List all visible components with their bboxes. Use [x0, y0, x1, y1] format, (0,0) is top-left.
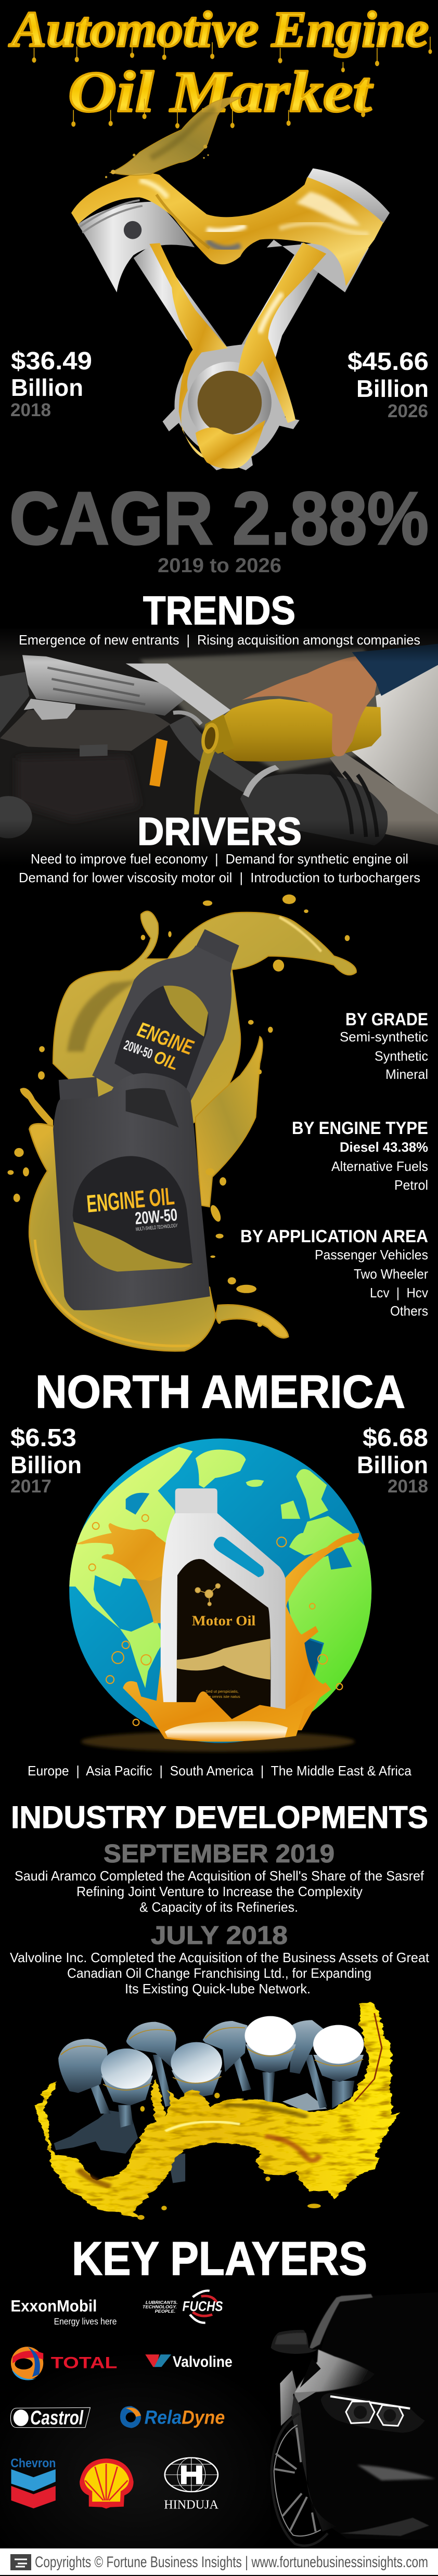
bottom fade: [0, 820, 438, 865]
photo: pouring oil into engine: [0, 625, 438, 865]
dipstick: [149, 738, 168, 787]
stat: 2018 market size: [10, 347, 92, 420]
illustration: globe and motor oil bottle: [67, 1438, 375, 1751]
logo: RelaDyne: RelaDyne: [145, 2406, 225, 2428]
segment: by application area: Two Wheeler: [354, 1266, 428, 1282]
segment: by application area: [240, 1227, 428, 1319]
right piston lower skirt: [267, 240, 369, 292]
segment: by grade: BY GRADE: [345, 1010, 428, 1029]
logo: Hinduja: [164, 2458, 219, 2511]
logo: ExxonMobil: [10, 2297, 117, 2326]
logo: Total: [11, 2347, 118, 2380]
segment: by application area: BY APPLICATION AREA: [240, 1227, 428, 1246]
logo: Fuchs: PEOPLE.: [155, 2309, 175, 2314]
logo: Castrol: [10, 2406, 90, 2429]
oil coating across pistons: [71, 173, 383, 286]
stat: 2018 market size: $36.49: [11, 347, 92, 375]
splash crown in front: [123, 1666, 331, 1742]
segment: by engine type: [292, 1118, 428, 1193]
label molecule: [195, 1583, 220, 1606]
stat: North America 2017: 2017: [10, 1476, 51, 1497]
logo: Fuchs: TECHNOLOGY.: [143, 2304, 177, 2309]
oil splash behind bottle: [75, 1523, 359, 1730]
oil wave: [35, 2003, 399, 2220]
fender highlight: [280, 2371, 297, 2426]
development: September 2019: Refining Joint Venture to Increase the Complexity: [76, 1884, 363, 1899]
logo: Chevron: Chevron: [10, 2456, 56, 2470]
logo: Valvoline: [145, 2353, 233, 2371]
logo: ExxonMobil: ExxonMobil: [10, 2297, 97, 2315]
jug label text: MULTI-SHIELD TECHNOLOGY: [136, 1222, 178, 1232]
heading: drivers: DRIVERS: [137, 809, 302, 853]
segment: by engine type: Petrol: [394, 1177, 428, 1193]
dim engine detail lower left: [17, 755, 139, 820]
globe: [67, 1438, 375, 1743]
segment: by application area: Others: [390, 1303, 428, 1319]
hand: [242, 656, 377, 756]
stat: North America 2018: Billion: [357, 1451, 428, 1478]
title line 2: Oil Market: [68, 60, 373, 124]
stat: 2018 market size: Billion: [11, 374, 83, 401]
hoses: [0, 712, 388, 845]
illustration: engine pistons in oil: [35, 2003, 399, 2220]
stat: North America 2018: $6.68: [363, 1424, 428, 1452]
oil running down right rod: [238, 242, 326, 423]
windshield pillar: [310, 2294, 373, 2349]
back label text: OIL: [151, 1047, 181, 1074]
logo: ExxonMobil: Energy lives here: [54, 2316, 117, 2326]
glow under splash: [81, 1731, 355, 1751]
label small text: [205, 1689, 240, 1699]
logo: Shell: [80, 2458, 134, 2509]
piston ring accents: [61, 2027, 363, 2090]
stat: North America 2017: $6.53: [10, 1424, 76, 1452]
illustration: oil-covered twin pistons: [71, 169, 390, 470]
left piston body: [78, 200, 195, 292]
oil pooled at big end: [196, 420, 265, 469]
logos: [10, 2290, 233, 2511]
logo: Fuchs: [143, 2290, 223, 2323]
hood highlight: [294, 2350, 375, 2393]
segment: by grade: Mineral: [385, 1066, 428, 1082]
development: July 2018: [10, 1922, 430, 1997]
heading: industry developments: INDUSTRY DEVELOPMENTS: [11, 1800, 428, 1835]
lower bumper highlights: [340, 2465, 435, 2536]
oil running down left rod: [149, 243, 228, 462]
development: July 2018: Its Existing Quick-lube Network.: [125, 1981, 311, 1997]
drivers list: Need to improve fuel economy | Demand for synthetic engine oil: [31, 851, 408, 867]
jug label: [73, 1156, 193, 1271]
segment: by engine type: Alternative Fuels: [331, 1158, 428, 1174]
logo: Fuchs: LUBRICANTS.: [146, 2300, 178, 2305]
back label text: 20W-50: [122, 1037, 154, 1062]
development: July 2018: Canadian Oil Change Franchising Ltd., for Expanding: [67, 1965, 371, 1981]
drivers list: [19, 851, 420, 885]
car body: [281, 2292, 438, 2540]
right piston crown: [307, 169, 390, 223]
other regions list: Europe | Asia Pacific | South America | The Middle East & Africa: [28, 1763, 412, 1779]
back label text: ENGINE: [135, 1018, 196, 1060]
development: September 2019: & Capacity of its Refineries.: [139, 1899, 298, 1915]
development: July 2018: JULY 2018: [151, 1922, 288, 1950]
front jug: [53, 1073, 210, 1310]
splash droplets: [89, 1515, 342, 1725]
stat: North America 2018: 2018: [388, 1476, 428, 1497]
side panel: [291, 2394, 337, 2532]
logo: Fuchs: FUCHS: [183, 2299, 223, 2314]
key players backdrop glow: [0, 2341, 270, 2548]
shoulder strip: [294, 2391, 317, 2403]
CAGR period: 2019 to 2026: [158, 555, 281, 577]
logo: Hinduja: HINDUJA: [164, 2497, 219, 2511]
wheel: [272, 2414, 328, 2546]
jug label text: ENGINE OIL: [86, 1182, 175, 1218]
segment: by application area: Passenger Vehicles: [315, 1247, 428, 1263]
segment: by engine type: BY ENGINE TYPE: [292, 1118, 428, 1138]
headlight: [321, 2393, 425, 2433]
front pistons: [101, 2016, 364, 2105]
label waves: [176, 1639, 270, 1680]
back bottle: [92, 929, 239, 1123]
label title: Motor Oil: [192, 1613, 256, 1629]
hood crease: [300, 2358, 321, 2388]
top fade: [0, 625, 438, 662]
jug label text: 20W-50: [134, 1205, 178, 1228]
stat: 2018 market size: 2018: [10, 400, 51, 420]
stat: North America 2017: Billion: [10, 1451, 82, 1478]
stat: 2026 market size: Billion: [356, 375, 429, 402]
jug label text: [86, 1182, 178, 1237]
mirror: [271, 2330, 317, 2354]
oil stream: [194, 751, 215, 814]
footer bar: [0, 2548, 438, 2575]
title oil drips: [32, 36, 432, 128]
motor oil bottle: [161, 1488, 286, 1730]
development: September 2019: Saudi Aramco Completed the Acquisition of Shell's Share of the Sasref: [15, 1868, 424, 1884]
segment: by grade: Synthetic: [375, 1048, 428, 1064]
stat: 2026 market size: 2026: [388, 401, 428, 421]
logo: Castrol: Castrol: [30, 2406, 84, 2429]
heading: North America: NORTH AMERICA: [35, 1366, 405, 1418]
heading: trends: TRENDS: [143, 588, 295, 633]
stat: North America 2017: [10, 1424, 82, 1497]
left connecting rod: [134, 244, 229, 354]
heading: key players: KEY PLAYERS: [72, 2233, 367, 2285]
logo: RelaDyne: [120, 2406, 225, 2428]
trends list: Emergence of new entrants | Rising acquisition amongst companies: [19, 632, 420, 648]
segment: by engine type: Diesel 43.38%: [340, 1139, 428, 1155]
logo: Chevron: [10, 2456, 56, 2508]
footer logo mark: [10, 2554, 31, 2570]
development: September 2019: SEPTEMBER 2019: [104, 1840, 334, 1868]
right connecting rod: [240, 242, 328, 364]
oil bottle: [199, 699, 381, 762]
bright panel right: [330, 665, 438, 845]
development: July 2018: Valvoline Inc. Completed the Acquisition of the Business Assets of Great: [10, 1950, 430, 1965]
intake manifold: [0, 655, 230, 751]
drivers list: Demand for lower viscosity motor oil | Introduction to turbochargers: [19, 870, 420, 885]
big end ring: [163, 344, 300, 470]
sleeve: [352, 644, 438, 696]
engine bay background: [139, 648, 397, 772]
segment: by application area: Lcv | Hcv: [370, 1285, 428, 1300]
oil splash: [7, 895, 356, 1351]
oil droplets: [7, 895, 350, 1327]
logo: Total: TOTAL: [51, 2354, 118, 2372]
segment: by grade: Semi-synthetic: [340, 1029, 428, 1045]
crankshaft and rods: [54, 2050, 354, 2183]
logo: Valvoline: Valvoline: [173, 2353, 233, 2371]
label small text: ide omnis iste natus: [205, 1694, 240, 1699]
oil pour stream over title: [105, 97, 242, 178]
illustration: engine oil bottles with splash: [7, 895, 356, 1351]
title line 1: Automotive Engine: [8, 2, 429, 57]
stat: 2026 market size: $45.66: [347, 348, 429, 376]
car: [271, 2292, 438, 2546]
segment: by grade: [340, 1010, 428, 1082]
title: Automotive Engine Oil Market: [8, 2, 432, 128]
stat: 2026 market size: [347, 348, 429, 421]
engine detail label: [80, 744, 108, 756]
stat: North America 2018: [357, 1424, 428, 1497]
back pistons: [58, 2020, 324, 2093]
back label text: [121, 1015, 196, 1078]
label small text: Sed ut perspiciatis,: [205, 1689, 239, 1694]
development: September 2019: [15, 1840, 424, 1915]
